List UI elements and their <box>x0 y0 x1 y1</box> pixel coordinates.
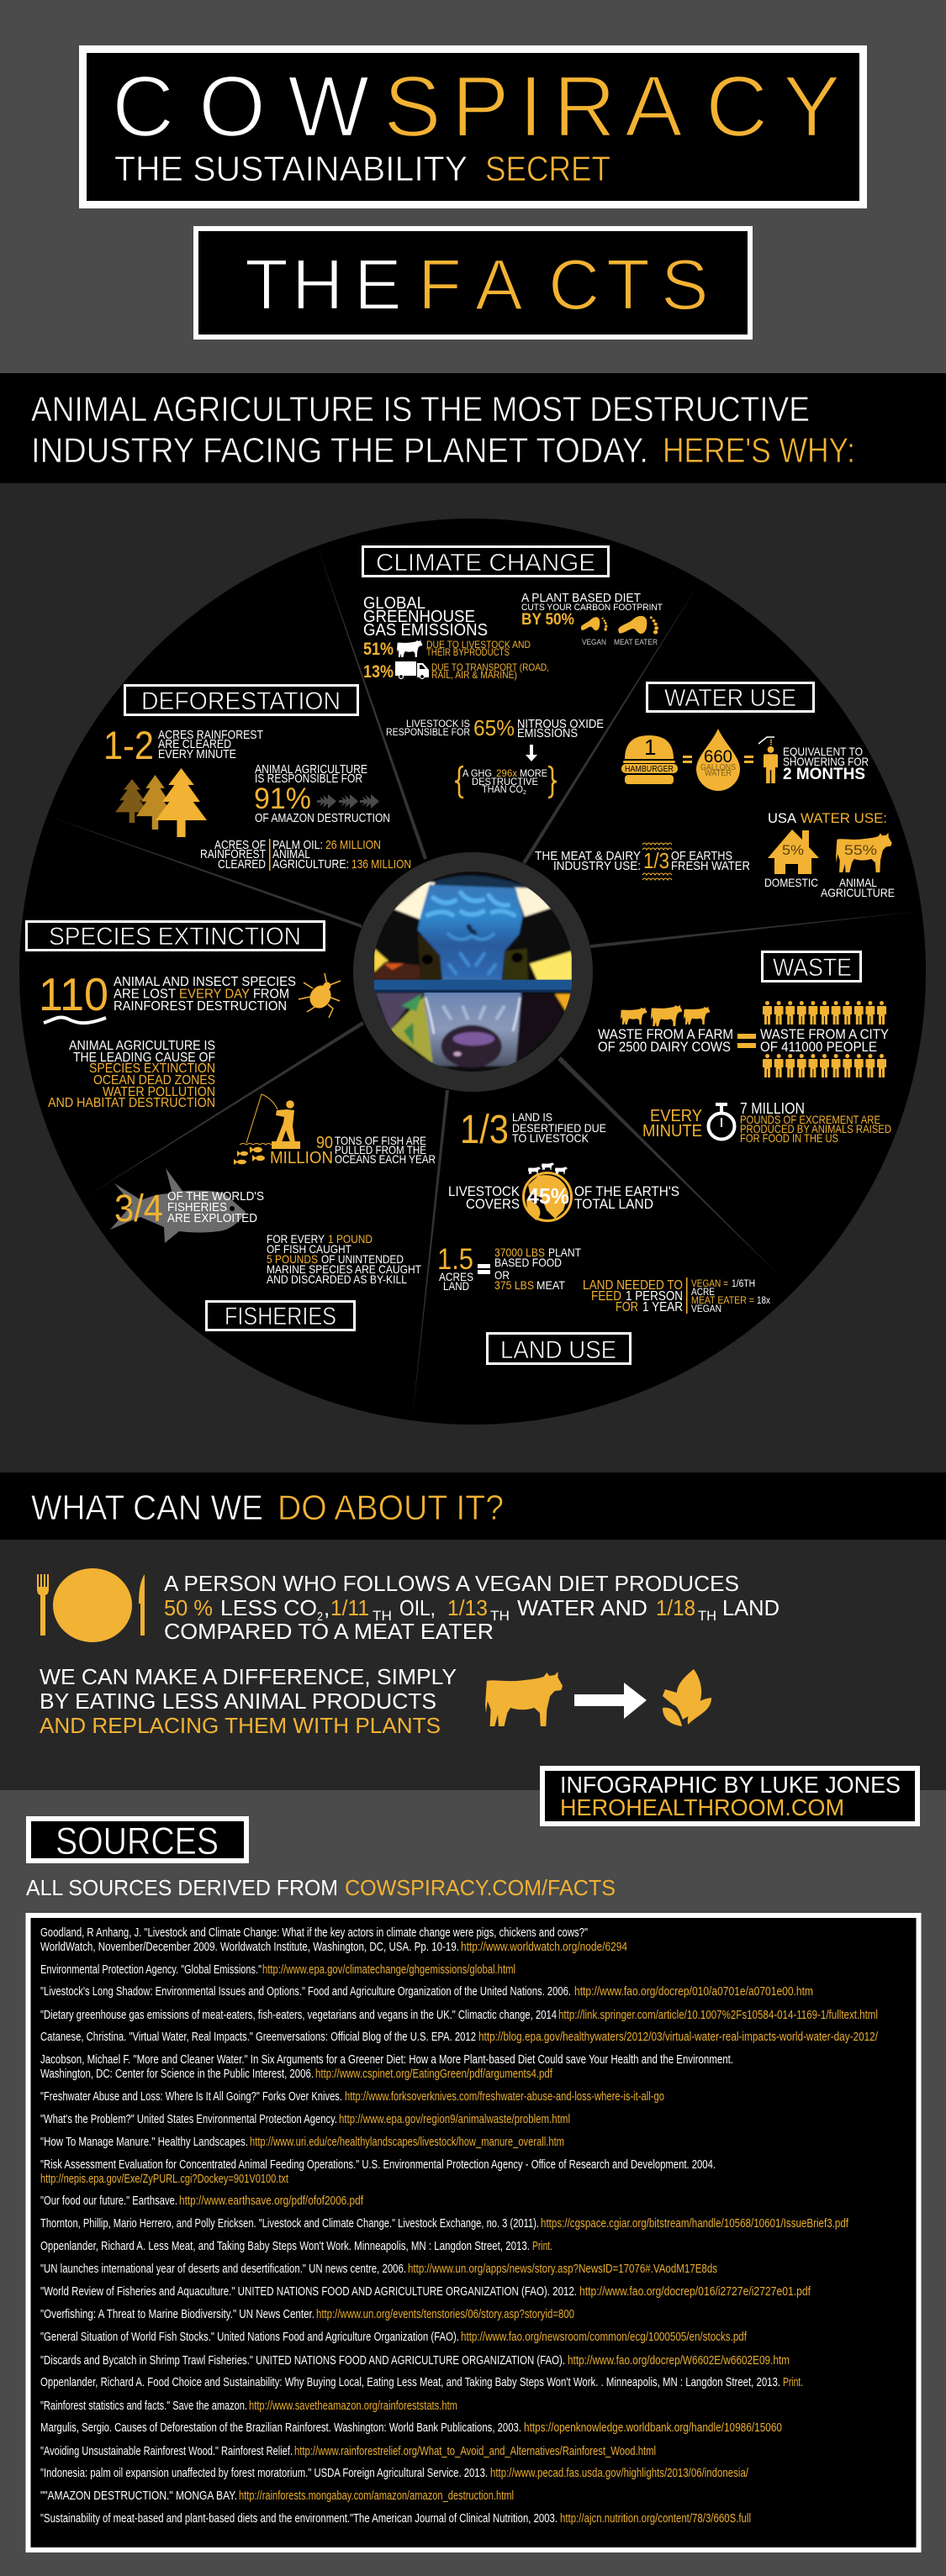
stat: 1.5 acres land: OR <box>494 1268 510 1282</box>
panel: source list: Goodland, R Anhang, J. "Livestock and Climate Change: What if the key actors in climate change were pigs, chickens and cows?" <box>40 1926 588 1940</box>
text: land needed to feed 1 person: 18x <box>757 1296 770 1306</box>
text: by-kill: OF FISH CAUGHT <box>267 1242 351 1256</box>
stat: 90 million tons: MILLION <box>270 1149 333 1167</box>
banner: most destructive industry: HERE'S WHY: <box>663 430 855 470</box>
stat: one third of fresh water: FRESH WATER <box>671 859 750 873</box>
text: leading cause of: ANIMAL AGRICULTURE IS <box>69 1039 215 1053</box>
text: waste comparison: OF 411000 PEOPLE <box>760 1039 877 1055</box>
panel: source list: "How To Manage Manure." Healthy Landscapes. <box>40 2136 248 2149</box>
panel: source list: http://www.savetheamazon.org/rainforeststats.htm <box>249 2400 457 2413</box>
panel: source list: "World Review of Fisheries and Aquaculture." UNITED NATIONS FOOD AND AGRICULTURE ORGANIZATION (FAO). 2012. <box>40 2285 577 2299</box>
panel: source list: Print. <box>783 2376 803 2389</box>
icon: insect <box>299 973 341 1018</box>
stat: livestock covers 45%: TOTAL LAND <box>574 1196 653 1212</box>
text: land needed to feed 1 person: VEGAN = <box>691 1279 728 1289</box>
stat: 1.5 acres land: 375 LBS <box>494 1278 534 1292</box>
icon: rows of people <box>763 1001 886 1077</box>
text: acres of rainforest cleared: ACRES OF <box>214 838 266 852</box>
panel: source list: http://www.earthsave.org/pdf/ofof2006.pdf <box>179 2194 364 2208</box>
chart: facts wheel <box>19 519 926 1425</box>
text: vegan diet comparison: TH <box>373 1608 392 1624</box>
stat: 1.5 acres land: PLANT <box>548 1246 581 1259</box>
stat: livestock covers 45%: LIVESTOCK <box>448 1183 521 1199</box>
stat: 3/4 of fisheries exploited: FISHERIES <box>167 1200 227 1214</box>
icon: house 5% domestic <box>764 830 819 889</box>
text: leading cause of: OCEAN DEAD ZONES <box>93 1073 215 1088</box>
icon: cow 55% animal agriculture: 55% <box>844 842 877 858</box>
text: by-kill: OF UNINTENDED <box>321 1252 404 1266</box>
credit box: INFOGRAPHIC BY LUKE JONES <box>560 1772 901 1798</box>
panel: source list: http://www.fao.org/newsroom/common/ecg/1000505/en/stocks.pdf <box>461 2331 748 2344</box>
panel: source list: "Indonesia: palm oil expansion unaffected by forest moratorium." USDA Foreign Agricultural Service. 2013. <box>40 2467 488 2480</box>
stat: 3/4 of fisheries exploited: 3/4 <box>114 1187 163 1230</box>
text: land needed to feed 1 person: ACRE <box>691 1288 715 1298</box>
stat: 65% nitrous oxide: RESPONSIBLE FOR <box>386 726 470 738</box>
stat: 65% nitrous oxide: LIVESTOCK IS <box>406 718 470 730</box>
banner: what can we do about it: DO ABOUT IT? <box>277 1488 504 1527</box>
stat: 13% due to transport: RAIL, AIR & MARINE) <box>431 669 517 681</box>
icon: house 5% domestic: DOMESTIC <box>764 876 818 889</box>
section title: species extinction: SPECIES EXTINCTION <box>49 923 301 951</box>
text: make a difference: AND REPLACING THEM WITH PLANTS <box>40 1713 441 1738</box>
arrow: down <box>526 745 537 761</box>
text: all sources derived from: ALL SOURCES DERIVED FROM <box>26 1875 338 1900</box>
stat: one third of fresh water: 1/3 <box>643 848 669 873</box>
text: vegan diet comparison: 1/18 <box>656 1595 695 1620</box>
stat: 65% nitrous oxide: NITROUS OXIDE <box>517 717 604 731</box>
text: land needed to feed 1 person: MEAT EATER = <box>691 1296 754 1306</box>
panel: source list: "Risk Assessment Evaluation for Concentrated Animal Feeding Operations." U.S. Environmental Protection Agency - Office of Research and Development. 2004. <box>40 2158 716 2172</box>
icon: globe with cows <box>523 1162 572 1220</box>
stat: 90 million tons: PULLED FROM THE <box>335 1143 426 1156</box>
title: COWSPIRACY: SPIRACY <box>383 58 841 155</box>
icon: cow <box>485 1672 563 1726</box>
text: all sources derived from: COWSPIRACY.COM/FACTS <box>345 1875 616 1900</box>
text: acres of rainforest cleared: RAINFOREST <box>200 847 266 861</box>
text: vegan diet comparison: TH <box>490 1608 510 1624</box>
icon: water drop 660 gallons: WATER <box>705 769 732 778</box>
text: vegan diet comparison: LAND <box>722 1595 780 1620</box>
stat: 1.5 acres land: ACRES <box>439 1270 473 1283</box>
panel: source list: Thornton, Phillip, Mario Herrero, and Polly Ericksen. "Livestock and Climate Change." Livestock Exchange, no. 3 (2011). <box>40 2217 539 2231</box>
text: leading cause of: THE LEADING CAUSE OF <box>73 1051 215 1065</box>
icon: cow 55% animal agriculture <box>821 833 895 899</box>
text: equivalent to showering 2 months: 2 MONTHS <box>783 766 865 783</box>
text: leading cause of <box>48 1039 215 1110</box>
stat: 51% due to livestock <box>363 639 531 659</box>
text: all sources derived from <box>26 1875 616 1900</box>
subtitle: the sustainability secret: SECRET <box>485 149 610 188</box>
text: make a difference: BY EATING LESS ANIMAL PRODUCTS <box>40 1688 436 1714</box>
panel: source list: WorldWatch, November/December 2009. Worldwatch Institute, Washington, DC, USA. Pp. 10-19. <box>40 1941 459 1954</box>
text: every minute: EVERY <box>650 1107 702 1125</box>
icon: stopwatch <box>708 1103 735 1140</box>
panel: source list: "Avoiding Unsustainable Rainforest Wood." Rainforest Relief. <box>40 2445 293 2458</box>
text: vegan diet comparison: TH <box>698 1608 716 1624</box>
panel: source list: ""AMAZON DESTRUCTION." MONGA BAY. <box>40 2489 237 2503</box>
panel: source list: "Sustainability of meat-based and plant-based diets and the environment."The American Journal of Clinical Nutrition, 2003. <box>40 2512 558 2526</box>
stat: 3/4 of fisheries exploited: OF THE WORLD'S <box>167 1189 264 1204</box>
text: vegan diet comparison: 1/11 <box>330 1595 369 1620</box>
text: acres of rainforest cleared: 136 MILLION <box>351 857 411 872</box>
text: vegan diet comparison: A PERSON WHO FOLLOWS A VEGAN DIET PRODUCES <box>164 1571 739 1596</box>
icon: house 5% domestic: 5% <box>782 842 804 858</box>
icon: equals <box>744 756 753 763</box>
text: vegan diet comparison: OIL, <box>399 1595 436 1620</box>
panel: deforestation <box>103 686 411 872</box>
section title: land use: LAND USE <box>500 1336 616 1364</box>
stat: one third of fresh water: THE MEAT & DAIRY <box>535 849 641 863</box>
text: plant based diet: CUTS YOUR CARBON FOOTPRINT <box>521 603 663 613</box>
callout: GHG 296x more destructive: 2 <box>523 790 526 796</box>
stat: 91% of amazon destruction <box>254 762 390 825</box>
icon: hamburger <box>621 735 678 784</box>
panel: source list: "Overfishing: A Threat to Marine Biodiversity." UN News Center. <box>40 2308 314 2321</box>
stat: 110 species lost <box>39 968 296 1023</box>
stat: 65% nitrous oxide: 65% <box>473 715 515 740</box>
banner: what can we do about it <box>0 1472 946 1540</box>
icon: truck <box>395 661 429 679</box>
icon: hamburger: 1 <box>644 735 656 760</box>
text: global greenhouse gas emissions: GLOBAL <box>363 594 425 613</box>
subtitle: the sustainability secret: THE SUSTAINABILITY <box>114 149 468 188</box>
background: wheel section <box>0 483 946 1790</box>
panel: source list: http://www.cspinet.org/EatingGreen/pdf/arguments4.pdf <box>315 2068 553 2081</box>
panel: source list: Print. <box>532 2240 552 2253</box>
stat: 1/3 land desertified: LAND IS <box>512 1110 552 1124</box>
stat: livestock covers 45%: COVERS <box>466 1196 520 1212</box>
text: every minute: MINUTE <box>642 1122 702 1140</box>
text: vegan diet comparison: 2 <box>317 1609 323 1624</box>
panel: fisheries <box>110 1094 436 1330</box>
panel: source list: http://nepis.epa.gov/Exe/ZyPURL.cgi?Dockey=901V0100.txt <box>40 2173 288 2186</box>
stat: one third of fresh water: OF EARTHS <box>671 849 732 863</box>
text: acres of rainforest cleared: ANIMAL <box>272 847 310 861</box>
stat: 91% of amazon destruction: ANIMAL AGRICULTURE <box>255 762 367 777</box>
icon: globe with cows: 45% <box>527 1183 569 1209</box>
icon: cow 55% animal agriculture: AGRICULTURE <box>821 886 895 899</box>
text: equivalent to showering 2 months: SHOWERING FOR <box>783 755 869 768</box>
stat: 7 million pounds of excrement <box>740 1100 891 1145</box>
panel: source list: "Rainforest statistics and facts." Save the amazon. <box>40 2400 247 2413</box>
text: acres of rainforest cleared: AGRICULTURE: <box>272 857 349 872</box>
stat: 1/3 land desertified <box>460 1108 606 1152</box>
icon: person showering <box>758 737 778 783</box>
panel: source list: Catanese, Christina. "Virtual Water, Real Impacts." Greenversations: Official Blog of the U.S. EPA. 2012 <box>40 2031 476 2044</box>
text: make a difference <box>40 1664 457 1738</box>
heading: sources: SOURCES <box>55 1820 219 1862</box>
text: by-kill: FOR EVERY <box>267 1232 325 1246</box>
icon: vegan and meat eater footprints: VEGAN <box>582 638 606 646</box>
stat: 7 million pounds of excrement: PRODUCED BY ANIMALS RAISED <box>740 1122 891 1135</box>
text: land needed to feed 1 person: VEGAN <box>691 1304 721 1314</box>
background: sources section <box>0 1790 946 2576</box>
text: acres of rainforest cleared: 26 MILLION <box>325 838 381 852</box>
icon: water drop 660 gallons <box>696 729 740 791</box>
stat: 3/4 of fisheries exploited: ARE EXPLOITED <box>167 1211 257 1225</box>
text: waste comparison: WASTE FROM A FARM <box>598 1026 733 1042</box>
text: by-kill: AND DISCARDED AS BY-KILL <box>267 1272 407 1286</box>
text: acres of rainforest cleared: PALM OIL: <box>272 838 323 852</box>
panel: source list: http://www.epa.gov/region9/animalwaste/problem.html <box>339 2113 570 2126</box>
section title: water use: WATER USE <box>664 685 796 712</box>
text: acres of rainforest cleared: CLEARED <box>218 857 266 872</box>
text: equivalent to showering 2 months: EQUIVALENT TO <box>783 745 863 758</box>
stat: 1.5 acres land: LAND <box>443 1279 469 1293</box>
icon: grey fish <box>110 1168 246 1243</box>
stat: 1.5 acres land <box>437 1243 581 1293</box>
banner: most destructive industry <box>0 373 946 483</box>
text: plant based diet: BY 50% <box>521 611 574 629</box>
heading: THE FACTS: THE <box>245 245 402 325</box>
panel: source list: "Dietary greenhouse gas emissions of meat-eaters, fish-eaters, vegetarians and vegans in the UK." Climactic change, 2014 <box>40 2009 557 2022</box>
panel: land use <box>437 1108 770 1364</box>
icon: vegan and meat eater footprints <box>581 616 658 646</box>
panel: source list: Washington, DC: Center for Science in the Public Interest, 2006. <box>40 2068 314 2081</box>
panel: source list: http://www.fao.org/docrep/010/a0701e/a0701e00.htm <box>574 1985 813 1999</box>
title panel: Cowspiracy <box>82 49 863 205</box>
text: make a difference: WE CAN MAKE A DIFFERENCE, SIMPLY <box>40 1664 457 1689</box>
stat: 7 million pounds of excrement: 7 MILLION <box>740 1100 805 1117</box>
panel: source list: http://www.forksoverknives.com/freshwater-abuse-and-loss-where-is-it-all-go <box>345 2090 664 2104</box>
panel: source list: Environmental Protection Agency. "Global Emissions." <box>40 1963 262 1977</box>
icon: hamburger: HAMBURGER <box>625 765 674 774</box>
stat: 110 species lost: FROM <box>253 987 289 1002</box>
heading: THE FACTS: FACTS <box>418 245 709 325</box>
banner: what can we do about it: WHAT CAN WE <box>31 1488 263 1527</box>
icon: plate and cutlery <box>37 1568 145 1642</box>
text: global greenhouse gas emissions: GREENHOUSE <box>363 608 475 626</box>
panel: source list: "What's the Problem?" United States Environmental Protection Agency. <box>40 2113 337 2126</box>
text: vegan diet comparison: LESS CO <box>220 1595 317 1620</box>
stat: 110 species lost: 110 <box>39 968 108 1020</box>
text: plant based diet: A PLANT BASED DIET <box>521 591 641 605</box>
stat: 7 million pounds of excrement: POUNDS OF EXCREMENT ARE <box>740 1113 880 1126</box>
stat: 110 species lost: EVERY DAY <box>179 987 250 1002</box>
panel: source list: http://www.fao.org/docrep/016/i2727e/i2727e01.pdf <box>579 2285 811 2299</box>
panel: species extinction <box>27 921 341 1110</box>
stat: 1-2 acres: ACRES RAINFOREST <box>158 728 263 742</box>
panel: source list: https://cgspace.cgiar.org/bitstream/handle/10568/10601/IssueBrief3.pdf <box>541 2217 849 2231</box>
panel: source list <box>29 1915 918 2550</box>
panel: source list: Jacobson, Michael F. "More and Cleaner Water." In Six Arguments for a Greener Diet: How a More Plant-based Diet Could save Your Health and the Environment. <box>40 2053 733 2067</box>
callout: GHG 296x more destructive: DESTRUCTIVE <box>472 776 538 788</box>
stat: 1-2 acres: 1-2 <box>103 723 154 767</box>
callout: GHG 296x more destructive: MORE <box>520 767 547 779</box>
text: equivalent to showering 2 months <box>783 745 869 783</box>
text: waste comparison: OF 2500 DAIRY COWS <box>598 1039 731 1055</box>
stat: 91% of amazon destruction: 91% <box>254 782 311 815</box>
arrow: cow to plant <box>574 1683 647 1719</box>
stat: 91% of amazon destruction: IS RESPONSIBLE FOR <box>255 772 362 786</box>
stat: 1.5 acres land: 1.5 <box>437 1243 473 1276</box>
stat: livestock covers 45% <box>448 1162 679 1220</box>
panel: source list: "Freshwater Abuse and Loss: Where Is It All Going?" Forks Over Knives. <box>40 2090 342 2104</box>
panel: source list: "General Situation of World Fish Stocks." United Nations Food and Agriculture Organization (FAO). <box>40 2331 459 2344</box>
stat: 51% due to livestock: THEIR BYPRODUCTS <box>426 646 510 658</box>
stat: 7 million pounds of excrement: FOR FOOD IN THE US <box>740 1131 838 1145</box>
stat: 110 species lost: RAINFOREST DESTRUCTION <box>114 999 287 1014</box>
panel: source list: http://www.uri.edu/ce/healthylandscapes/livestock/how_manure_overall.htm <box>250 2136 564 2149</box>
text: land needed to feed 1 person: FOR <box>616 1300 638 1314</box>
stat: 65% nitrous oxide <box>386 715 604 740</box>
panel: source list: "Discards and Bycatch in Shrimp Trawl Fisheries." UNITED NATIONS FOOD AND AGRICULTURE ORGANIZATION (FAO). <box>40 2354 565 2368</box>
callout: GHG 296x more destructive: 296x <box>496 767 517 779</box>
panel: source list: http://www.epa.gov/climatechange/ghgemissions/global.html <box>262 1963 515 1977</box>
stat: 90 million tons <box>270 1134 436 1167</box>
text: land needed to feed 1 person: 1/6TH <box>732 1279 755 1289</box>
text: vegan diet comparison: 50 % <box>164 1595 213 1620</box>
text: leading cause of: WATER POLLUTION <box>103 1085 215 1099</box>
stat: 90 million tons: 90 <box>316 1134 333 1152</box>
stat: 3/4 of fisheries exploited <box>114 1187 264 1230</box>
title: COWSPIRACY: COW <box>112 58 369 155</box>
stat: 65% nitrous oxide: EMISSIONS <box>517 726 578 740</box>
stat: 1/3 land desertified: DESERTIFIED DUE <box>512 1121 606 1135</box>
icon: cow 55% animal agriculture: ANIMAL <box>839 876 877 889</box>
text: land needed to feed 1 person: FEED <box>591 1289 621 1304</box>
panel: source list: https://openknowledge.worldbank.org/handle/10986/15060 <box>524 2421 782 2435</box>
section title: fisheries: FISHERIES <box>225 1303 336 1330</box>
panel: The Facts <box>196 229 750 337</box>
panel: climate change <box>363 546 663 798</box>
text: waste comparison: WASTE FROM A CITY <box>760 1026 889 1042</box>
text: acres of rainforest cleared <box>200 838 411 872</box>
text: waste comparison <box>598 1026 889 1055</box>
panel: source list: "Our food our future." Earthsave. <box>40 2194 177 2208</box>
panel: source list: http://www.un.org/apps/news/story.asp?NewsID=17076#.VAodM17E8ds <box>408 2263 717 2276</box>
stat: 110 species lost: ANIMAL AND INSECT SPECIES <box>114 975 296 989</box>
text: vegan diet comparison: WATER AND <box>517 1595 647 1620</box>
text: by-kill <box>267 1232 421 1286</box>
callout: GHG 296x more destructive <box>455 766 557 798</box>
stat: 110 species lost: ARE LOST <box>114 987 176 1002</box>
section title: climate change: CLIMATE CHANGE <box>376 550 595 577</box>
stat: 91% of amazon destruction: OF AMAZON DESTRUCTION <box>255 811 390 825</box>
callout: GHG 296x more destructive: A GHG <box>462 767 492 779</box>
panel: source list: http://www.un.org/events/tenstories/06/story.asp?storyid=800 <box>316 2308 574 2321</box>
text: land needed to feed 1 person <box>583 1277 770 1314</box>
panel: source list: http://rainforests.mongabay.com/amazon/amazon_destruction.html <box>239 2489 514 2503</box>
credit box <box>542 1768 917 1824</box>
icon: vegan and meat eater footprints: MEAT EATER <box>614 638 658 646</box>
text: land needed to feed 1 person: 1 PERSON <box>626 1289 683 1304</box>
panel: source list: http://www.rainforestrelief.org/What_to_Avoid_and_Alternatives/Rainforest_Wood.html <box>294 2445 656 2458</box>
section title: deforestation: DEFORESTATION <box>141 687 341 715</box>
stat: one third of fresh water: INDUSTRY USE: <box>553 859 641 873</box>
stat: 90 million tons: TONS OF FISH ARE <box>335 1134 426 1147</box>
header background <box>0 0 946 373</box>
stat: 13% due to transport: 13% <box>363 662 394 682</box>
text: vegan diet comparison: COMPARED TO A MEAT EATER <box>164 1619 494 1644</box>
text: vegan diet comparison: , <box>324 1595 330 1620</box>
panel: water use <box>535 682 895 899</box>
stat: 1-2 acres: EVERY MINUTE <box>158 747 236 761</box>
text: leading cause of: AND HABITAT DESTRUCTION <box>48 1096 215 1110</box>
text: by-kill: MARINE SPECIES ARE CAUGHT <box>267 1262 421 1276</box>
stat: 1.5 acres land: MEAT <box>536 1278 565 1292</box>
heading: USA water use: USA <box>768 810 797 826</box>
panel: source list: Margulis, Sergio. Causes of Deforestation of the Brazilian Rainforest. Washington: World Bank Publications, 2003. <box>40 2421 521 2435</box>
panel: source list: "UN launches international year of deserts and desertification." UN news centre, 2006. <box>40 2263 406 2276</box>
icon: equals <box>683 756 692 763</box>
text: global greenhouse gas emissions <box>363 594 488 640</box>
text: global greenhouse gas emissions: GAS EMISSIONS <box>363 621 488 640</box>
panel: source list: http://www.fao.org/docrep/W6602E/w6602E09.htm <box>568 2354 790 2368</box>
icon: three cows <box>621 1004 710 1026</box>
title: COWSPIRACY <box>112 58 841 155</box>
text: plant based diet <box>521 591 663 629</box>
panel: source list: http://www.worldwatch.org/node/6294 <box>461 1941 627 1954</box>
stat: livestock covers 45%: OF THE EARTH'S <box>574 1183 679 1199</box>
icon: fisherman <box>234 1094 300 1165</box>
panel: waste <box>598 951 891 1145</box>
icon: water drop 660 gallons: GALLONS <box>700 763 736 772</box>
icon: water drop 660 gallons: 660 <box>704 747 732 766</box>
stat: 1/3 land desertified: TO LIVESTOCK <box>512 1131 589 1145</box>
icon: trees <box>115 768 207 837</box>
icon: plant <box>663 1669 711 1726</box>
section title: waste: WASTE <box>773 954 852 982</box>
stat: 1/3 land desertified: 1/3 <box>460 1108 509 1152</box>
panel: source list: "Livestock's Long Shadow: Environmental Issues and Options." Food and Agriculture Organization of the United Nations. 2006. <box>40 1985 571 1999</box>
banner: most destructive industry: ANIMAL AGRICULTURE IS THE MOST DESTRUCTIVE <box>31 389 810 429</box>
heading: USA water use: WATER USE: <box>801 810 887 826</box>
callout: GHG 296x more destructive: THAN CO <box>482 783 523 795</box>
stat: 51% due to livestock: 51% <box>363 640 394 659</box>
banner: most destructive industry: INDUSTRY FACING THE PLANET TODAY. <box>31 430 648 470</box>
panel: source list: Oppenlander, Richard A. Less Meat, and Taking Baby Steps Won't Work. Minneapolis, MN : Langdon Street, 2013. <box>40 2240 530 2253</box>
stat: 13% due to transport: DUE TO TRANSPORT (ROAD, <box>431 661 549 673</box>
text: vegan diet comparison: 1/13 <box>447 1595 488 1620</box>
text: by-kill: 1 POUND <box>328 1232 373 1246</box>
credit box: HEROHEALTHROOM.COM <box>560 1794 844 1820</box>
stat: 1.5 acres land: BASED FOOD <box>494 1256 562 1269</box>
text: land needed to feed 1 person: LAND NEEDED TO <box>583 1278 683 1293</box>
text: by-kill: 5 POUNDS <box>267 1252 318 1266</box>
text: leading cause of: SPECIES EXTINCTION <box>89 1061 215 1076</box>
stat: 1.5 acres land: 37000 LBS <box>494 1246 545 1259</box>
stat: one third of fresh water <box>535 843 750 880</box>
panel: source list: http://ajcn.nutrition.org/content/78/3/660S.full <box>560 2512 751 2526</box>
text: vegan diet comparison <box>164 1571 780 1644</box>
text: land needed to feed 1 person: 1 YEAR <box>642 1300 683 1314</box>
hub: cow photo <box>353 852 593 1092</box>
heading: THE FACTS <box>245 245 709 325</box>
stat: 13% due to transport <box>363 661 549 682</box>
stat: 1-2 acres: ARE CLEARED <box>158 737 231 751</box>
stat: 90 million tons: OCEANS EACH YEAR <box>335 1152 436 1166</box>
stat: 51% due to livestock: DUE TO LIVESTOCK AND <box>426 639 531 651</box>
stat: 1-2 acres <box>103 723 263 767</box>
text: every minute <box>642 1107 702 1140</box>
panel: source list: http://www.pecad.fas.usda.gov/highlights/2013/06/indonesia/ <box>490 2467 749 2480</box>
